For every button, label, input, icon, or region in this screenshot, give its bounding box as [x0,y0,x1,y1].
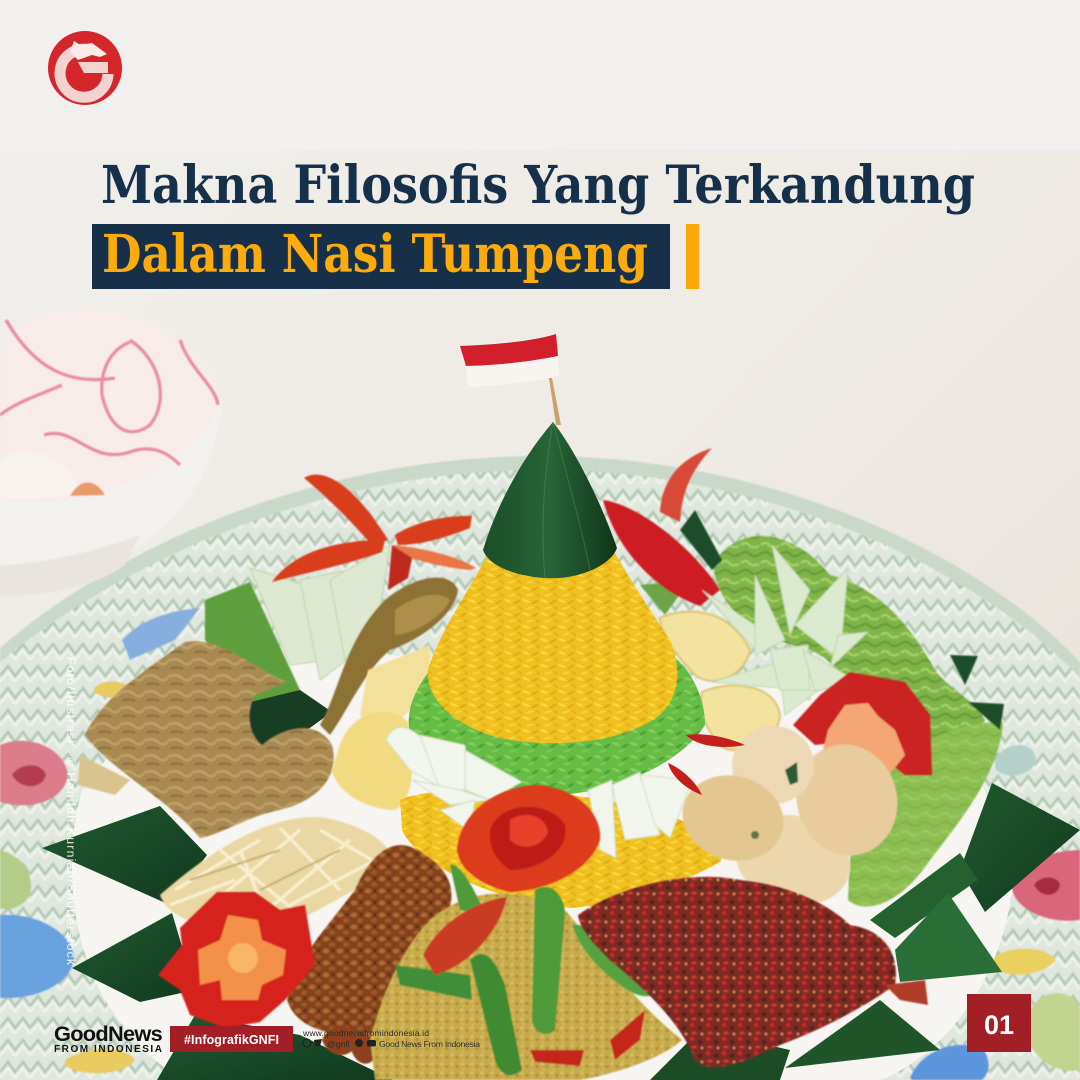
website and social text: @gnfi [327,1039,350,1049]
shredded crackers [160,817,393,930]
cucumber fans front [386,727,692,858]
yellow rice layer [428,548,677,743]
website and social text: www.goodnewsfromindonesia.id [302,1028,429,1038]
cucumber left [250,545,390,680]
small chilies [668,734,745,795]
beef rendang [578,877,928,1067]
carrot and tomato flower left [158,892,315,1028]
GoodNews logo: FROM INDONESIA [54,1044,162,1055]
tumpeng rice cone [400,422,721,908]
egg rolls right [660,612,780,750]
GoodNews logo [54,1023,162,1055]
green rice layer [409,655,705,795]
lettuce right [640,536,1004,907]
bowl of crackers [0,307,222,596]
logo [48,31,122,105]
hashtag label: #InfografikGNFI [184,1033,279,1047]
page number badge [967,994,1031,1052]
red chili right [603,448,722,606]
tomato flower right [793,672,932,780]
page number badge: 01 [984,1010,1014,1040]
bottom yellow rice [400,790,721,908]
tofu [332,645,430,810]
red chili flower left [272,475,476,590]
banana leaves [42,783,1080,1080]
hashtag label [170,1026,293,1052]
fried perkedel balls [673,726,910,918]
flag [460,334,561,425]
lettuce left [205,582,300,745]
tempe orek [287,845,452,1064]
title: Makna Filosofis Yang Terkandung [101,155,975,216]
photo credit: Foto/Ilustrasi : © Hanifah Kurniati/Shutterstock [64,657,78,966]
peanuts [322,1026,378,1064]
banana leaf cone [483,422,617,578]
accent bar [686,224,699,289]
cucumber right [702,545,868,715]
plate [0,456,1080,1080]
plate flowers [0,608,1080,1080]
subtitle band: Dalam Nasi Tumpeng [102,224,648,285]
tomato rose [457,785,600,892]
white plate centre [72,640,1012,1080]
website and social text [302,1028,480,1049]
website and social text: Good News From Indonesia [379,1039,480,1049]
urap vegetables with green beans [370,865,682,1080]
chicken [78,578,458,838]
GoodNews logo: GoodNews [54,1023,162,1046]
